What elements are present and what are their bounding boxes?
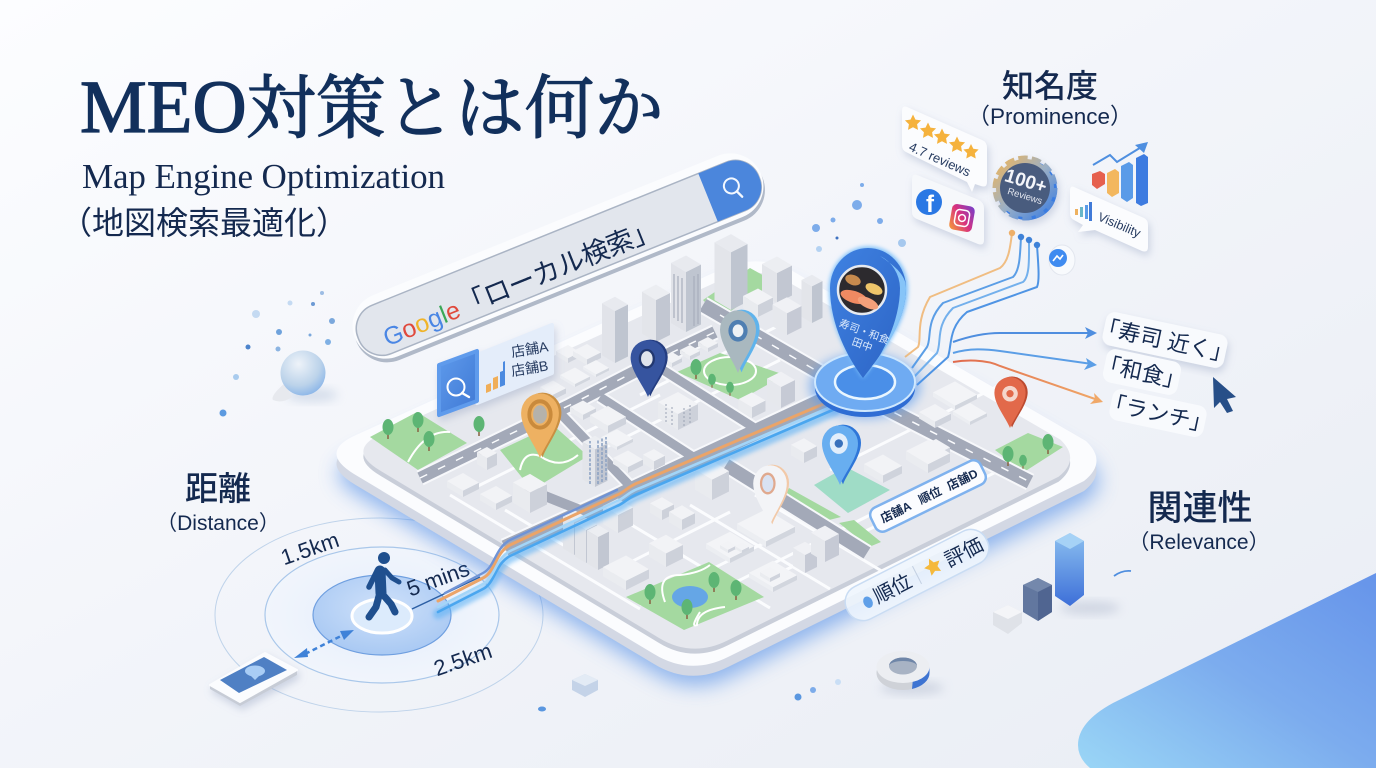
icon: instagram — [948, 203, 976, 233]
small map pin: red — [994, 377, 1028, 428]
heading: prominence: 知名度 — [1002, 68, 1098, 104]
subtitle english: Map Engine Optimization — [82, 157, 445, 196]
platform side — [336, 271, 1097, 676]
search query: 「ローカル検索」 — [455, 214, 662, 321]
badge: 100+ reviews — [996, 159, 1057, 220]
icon: smartphone — [210, 653, 297, 706]
search icon — [448, 378, 469, 397]
mark: small blue accent — [1114, 571, 1131, 576]
label: 5 mins line — [412, 577, 480, 609]
mini bars — [1075, 202, 1092, 221]
card: reviews — [902, 106, 987, 192]
store labels second: 店舗B — [510, 357, 549, 379]
subtitle japanese: （地図検索最適化） — [60, 205, 348, 241]
subheading: prominence: （Prominence） — [967, 104, 1133, 129]
trees — [382, 359, 1054, 619]
photo: sushi — [838, 266, 886, 314]
floating dots around pin — [812, 183, 906, 252]
panel: connector lines to prominence — [905, 230, 1040, 385]
platform surface — [336, 261, 1097, 666]
pill: store rank table — [867, 458, 989, 534]
pill: store rank table: 順位 — [916, 483, 944, 507]
heading: relevance: 関連性 — [1147, 489, 1253, 528]
card: store search result — [439, 325, 552, 415]
card: visibility — [1070, 186, 1148, 252]
keyword chip: lunch: 「ランチ」 — [1101, 390, 1214, 437]
title: MEO対策とは何か — [80, 66, 664, 149]
small map pin: orange — [521, 393, 561, 458]
icon: cursor — [1213, 377, 1236, 413]
pill: rank and rating: 評価 — [941, 533, 987, 572]
buildings: front row — [563, 461, 839, 592]
label: 1.5km: 1.5km — [277, 527, 342, 570]
label: Visibility — [1096, 210, 1143, 241]
label: 5 mins: 5 mins — [403, 556, 473, 601]
panel: isometric map platform — [336, 234, 1099, 686]
center glow — [352, 599, 412, 633]
chart: 3d bars — [993, 533, 1120, 634]
icon: messenger — [1049, 245, 1075, 275]
route lines to map pin — [438, 402, 835, 614]
pin base ring — [809, 353, 921, 419]
road edges — [420, 305, 1030, 553]
small map pin: navy — [631, 340, 668, 397]
keyword chip: japanese food: 「和食」 — [1096, 351, 1188, 394]
main map pin — [809, 246, 921, 419]
stars — [905, 114, 979, 158]
icon: walking person — [369, 552, 399, 617]
inner disc — [313, 575, 451, 655]
platform shadow — [338, 281, 1099, 686]
arrow: dashed distance — [294, 630, 354, 658]
pin text: 寿司・和食 — [837, 317, 892, 347]
pill: store rank table: 店舗A — [878, 498, 914, 526]
search bar — [356, 160, 765, 362]
parks — [370, 268, 1063, 630]
panel: keyword arrows — [953, 327, 1103, 404]
store labels: 店舗A — [510, 338, 550, 360]
review count: 4.7 reviews — [907, 139, 973, 180]
map ground — [363, 273, 1070, 649]
card: social icons — [912, 175, 984, 244]
pill: store rank table: 店舗D — [944, 465, 980, 493]
pill: rank and rating — [839, 524, 995, 626]
pin text second line: 田中 — [850, 335, 874, 354]
park paths — [408, 357, 756, 625]
chart: growth bars — [1092, 142, 1148, 206]
decoration: cubes and dots — [538, 674, 841, 712]
search button — [698, 160, 762, 222]
pond — [672, 586, 708, 608]
subheading: relevance: （Relevance） — [1128, 531, 1270, 554]
middle ring — [265, 547, 499, 683]
label: 2.5km: 2.5km — [430, 638, 495, 681]
buildings: middle row — [447, 429, 950, 513]
pin body — [829, 246, 908, 378]
icon: facebook: f — [926, 191, 935, 218]
outer ring — [215, 518, 543, 712]
buildings: back row — [540, 234, 987, 433]
decorative corner shape — [1078, 573, 1376, 768]
map tray edge — [363, 278, 1070, 654]
heading: distance: 距離 — [185, 470, 251, 507]
badge: 100+ reviews: Reviews — [1006, 186, 1044, 207]
keyword chip: sushi nearby: 「寿司 近く」 — [1095, 314, 1235, 367]
sidewalk lines — [450, 315, 1040, 609]
small map pin: grey blue — [720, 310, 760, 373]
small map pin: blue — [822, 425, 861, 485]
small map pin: white — [753, 465, 789, 525]
decoration: donut — [876, 651, 944, 695]
decoration: sphere and dots — [220, 291, 338, 416]
pill: rank and rating: 順位 — [870, 570, 916, 608]
mini chart — [486, 361, 505, 393]
roads — [420, 305, 1030, 553]
badge: 100+ reviews: 100+ — [1002, 165, 1049, 198]
Google logo: Google — [379, 296, 464, 352]
subheading: distance: （Distance） — [156, 512, 280, 535]
road dashes — [420, 315, 1030, 482]
panel: distance rings — [215, 518, 543, 712]
